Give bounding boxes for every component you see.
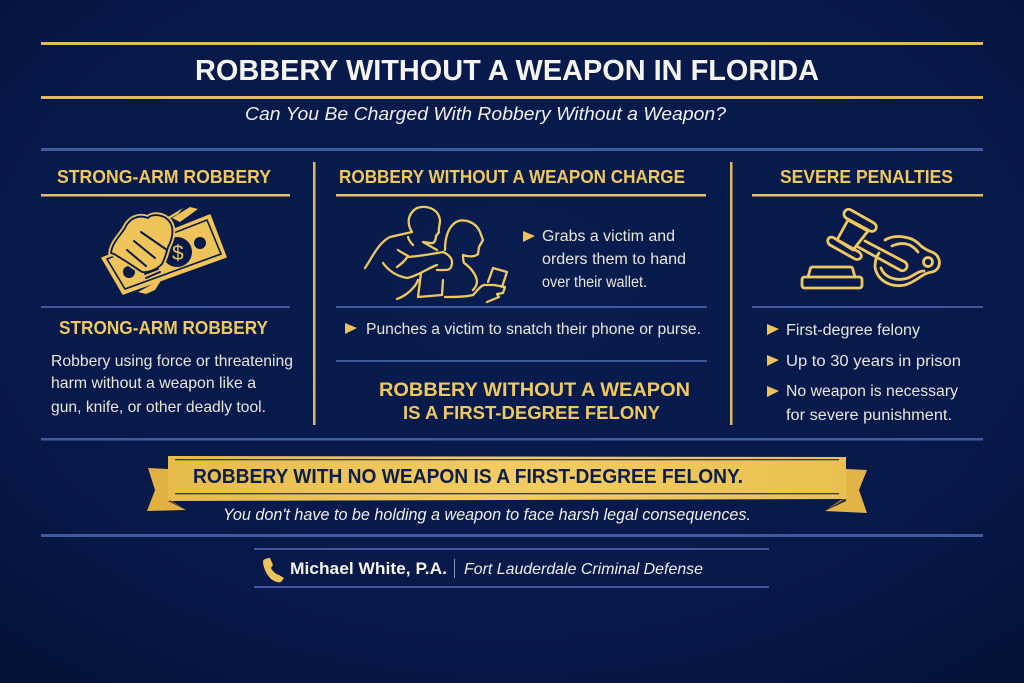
bullet: no weapon necessary [767,383,958,424]
banner caption: You don't have to be holding a weapon to face harsh legal consequences. [223,506,751,524]
banner text: ROBBERY WITH NO WEAPON IS A FIRST-DEGREE FELONY. [193,466,743,488]
callout: first-degree felony [379,380,690,423]
firm name: Michael White, P.A. [290,559,447,578]
bullet: grabs a victim: over their wallet. [542,274,647,291]
heading: charge: ROBBERY WITHOUT A WEAPON CHARGE [339,167,685,187]
footer [254,548,769,588]
heading: severe penalties: SEVERE PENALTIES [780,167,953,187]
description text: Robbery using force or threatening [51,353,293,370]
panel: strong-arm robbery [41,166,293,416]
panel: robbery without a weapon charge [336,167,707,423]
icon: fist holding cash [102,207,226,294]
bullet: grabs a victim: orders them to hand [542,251,686,268]
icon: fist holding cash: $ [172,242,184,265]
subtitle: Can You Be Charged With Robbery Without a Weapon? [245,104,726,124]
heading: strong-arm robbery: STRONG-ARM ROBBERY [57,166,272,187]
icon: two figures, one grabbing the other [365,207,507,302]
description text: harm without a weapon like a [51,375,256,392]
icon: gavel and handcuff [802,209,939,288]
description text: gun, knife, or other deadly tool. [51,399,266,416]
icon: phone [263,558,284,582]
subheading: STRONG-ARM ROBBERY [59,318,268,338]
callout: first-degree felony: ROBBERY WITHOUT A WEAPON [379,380,690,401]
firm descriptor: Fort Lauderdale Criminal Defense [464,561,703,578]
bullet: grabs a victim: Grabs a victim and [542,228,675,245]
title block [41,42,983,99]
bullet: first-degree felony: First-degree felony [786,322,920,339]
bullet: no weapon necessary: for severe punishment. [786,407,952,424]
title: ROBBERY WITHOUT A WEAPON IN FLORIDA [195,55,819,87]
callout: first-degree felony: IS A FIRST-DEGREE FELONY [403,403,660,423]
bullet: grabs a victim [523,228,686,291]
banner [147,456,867,513]
bullet: punches a victim: Punches a victim to snatch their phone or purse. [366,321,701,338]
description text [51,353,293,416]
panel: severe penalties [752,167,983,424]
bullet: no weapon necessary: No weapon is necessary [786,383,958,400]
bullet: up to 30 years: Up to 30 years in prison [786,353,961,370]
